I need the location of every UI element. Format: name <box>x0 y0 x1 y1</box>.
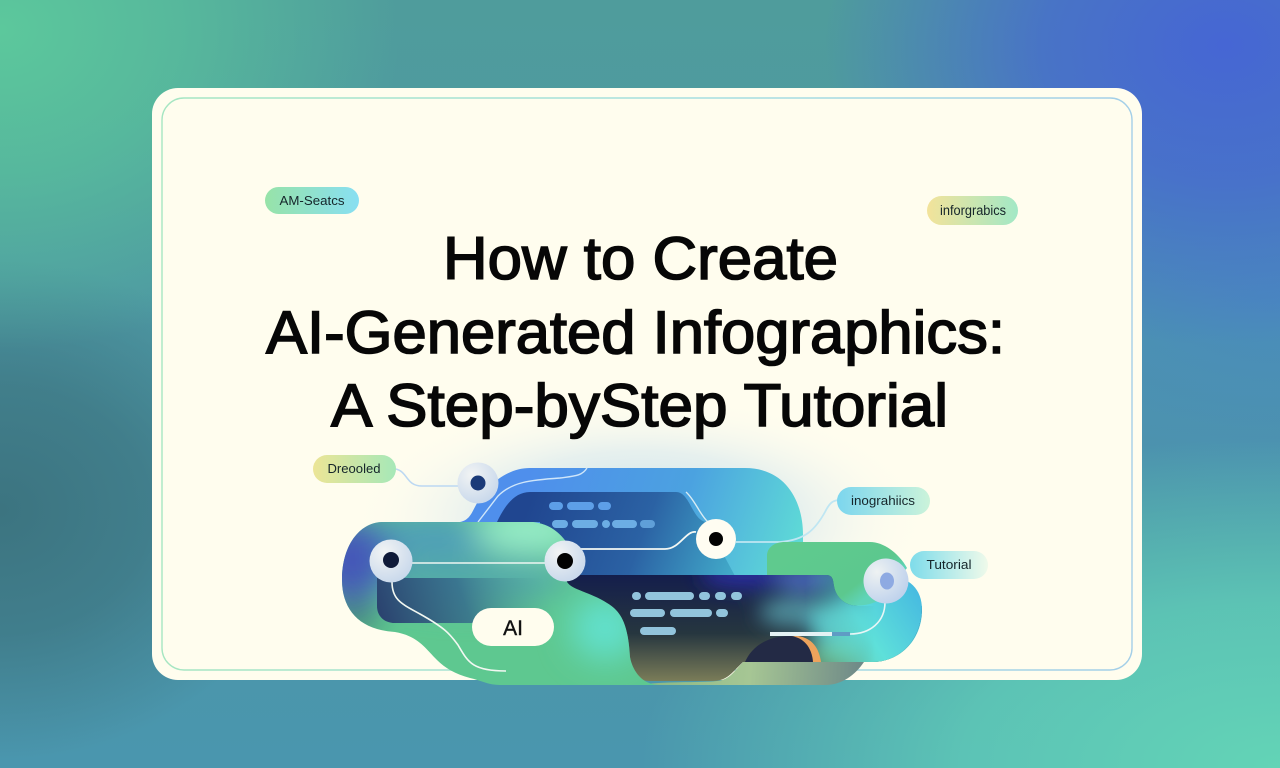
tag: inforgrabics <box>927 196 1018 225</box>
title: AI-Generated Infographics: <box>266 299 1005 366</box>
illustration: connected AI blobs <box>308 462 930 690</box>
node: right cream <box>696 519 736 559</box>
blob: bottom strip <box>640 662 864 685</box>
tag: AM-Seatcs <box>265 187 359 214</box>
tag: Dreooled: Dreooled <box>328 461 380 476</box>
blob: green patch <box>767 542 907 605</box>
code lines: dark window <box>630 592 742 635</box>
pill: AI <box>472 608 554 646</box>
bar: white slider <box>770 632 850 636</box>
connector: slider to node <box>850 602 885 634</box>
tag: AM-Seatcs: AM-Seatcs <box>280 193 345 208</box>
tag: Dreooled <box>313 455 396 483</box>
code lines: blue window <box>549 502 655 528</box>
connector: inograhiics to node <box>736 500 838 542</box>
connector: white line across blue blob <box>478 468 587 522</box>
panel: cream card <box>152 88 1142 680</box>
tag: inforgrabics: inforgrabics <box>940 203 1006 218</box>
tag: Tutorial <box>910 551 988 579</box>
panel: inner dark window <box>377 578 560 623</box>
tag: inograhiics <box>837 487 930 515</box>
connector: curved line to bottom <box>392 582 506 671</box>
shape: dark arch <box>745 636 813 662</box>
blob: front green shape <box>342 522 658 685</box>
node: left <box>370 540 412 582</box>
tag: Tutorial: Tutorial <box>926 557 972 572</box>
panel: dark code window <box>567 575 922 681</box>
connector: white line between nodes <box>412 562 545 564</box>
node: far right <box>864 558 908 604</box>
connector: Dreooled to node <box>396 469 460 486</box>
blob: right teal shape <box>820 575 922 662</box>
pill: AI: AI <box>503 617 523 640</box>
tag: inograhiics: inograhiics <box>851 493 916 508</box>
title: A Step-byStep Tutorial <box>331 372 948 439</box>
node: top left <box>458 462 498 504</box>
shape: orange arch <box>768 636 821 662</box>
panel: dark blue code window <box>497 492 735 576</box>
node: center <box>544 540 586 582</box>
blob: blue back shape <box>460 468 803 576</box>
title: How to Create <box>443 225 838 292</box>
title <box>266 225 1005 439</box>
